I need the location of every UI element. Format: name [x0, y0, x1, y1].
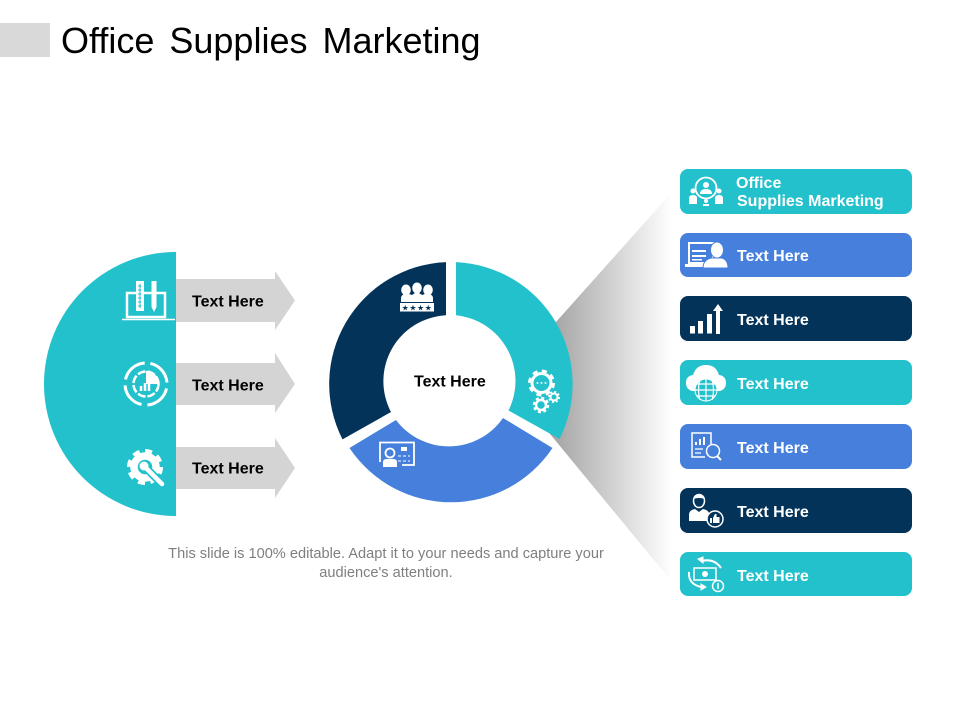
bar 3 [680, 296, 912, 341]
title: Office Supplies Marketing [61, 20, 481, 61]
center label: Text Here [414, 374, 486, 390]
icon: gear and wrench [129, 451, 163, 485]
icon: ruler and pencil [122, 281, 175, 320]
icon: laptop and person [685, 242, 728, 268]
description text: This slide is 100% editable. Adapt it to your needs and capture your [168, 546, 604, 562]
icon: presenter at board [380, 442, 414, 467]
bar 5 [680, 424, 912, 469]
segment: blue [350, 418, 552, 502]
bar 2 [680, 233, 912, 277]
arrow: item 1 [176, 271, 295, 330]
bar 7: Text Here [737, 568, 809, 585]
icon: gears [530, 371, 559, 412]
panel: left semicircle with icons [44, 252, 176, 516]
bar 6 [680, 488, 912, 533]
bar 6: Text Here [737, 504, 809, 521]
title accent block [0, 23, 50, 57]
icon: people target [689, 178, 723, 206]
bar 4 [680, 360, 912, 405]
arrow: item 2 [176, 353, 295, 413]
arrow: item 3: Text Here [192, 460, 264, 478]
icon: team with stars [400, 282, 434, 312]
bar 4: Text Here [737, 376, 809, 393]
bar 1: Office Supplies Marketing: Office [736, 175, 781, 192]
chart: donut [329, 262, 573, 502]
bar 3: Text Here [737, 312, 809, 329]
icon: person thumbs up [689, 494, 723, 527]
icon: report and magnifier [692, 433, 721, 460]
bar 1: Office Supplies Marketing: Supplies Marketing [737, 193, 884, 210]
description text: audience's attention. [319, 565, 453, 581]
bar 2: Text Here [737, 248, 809, 265]
arrow: item 2: Text Here [192, 378, 264, 394]
description text [168, 546, 604, 581]
gradient wedge [550, 192, 672, 582]
bar 7 [680, 552, 912, 596]
icon: money cycle [689, 557, 724, 592]
arrow: item 3 [176, 438, 295, 498]
icon: cloud and globe [686, 365, 726, 401]
icon: team with stars: ★★★★ [402, 304, 432, 312]
icon: circular chart [121, 359, 171, 409]
segment: navy [329, 262, 446, 439]
arrow: item 1: Text Here [192, 294, 264, 310]
icon: rising bars [690, 304, 723, 334]
bar 5: Text Here [737, 440, 809, 457]
bar 1: Office Supplies Marketing [680, 169, 912, 214]
segment: teal [456, 262, 573, 439]
